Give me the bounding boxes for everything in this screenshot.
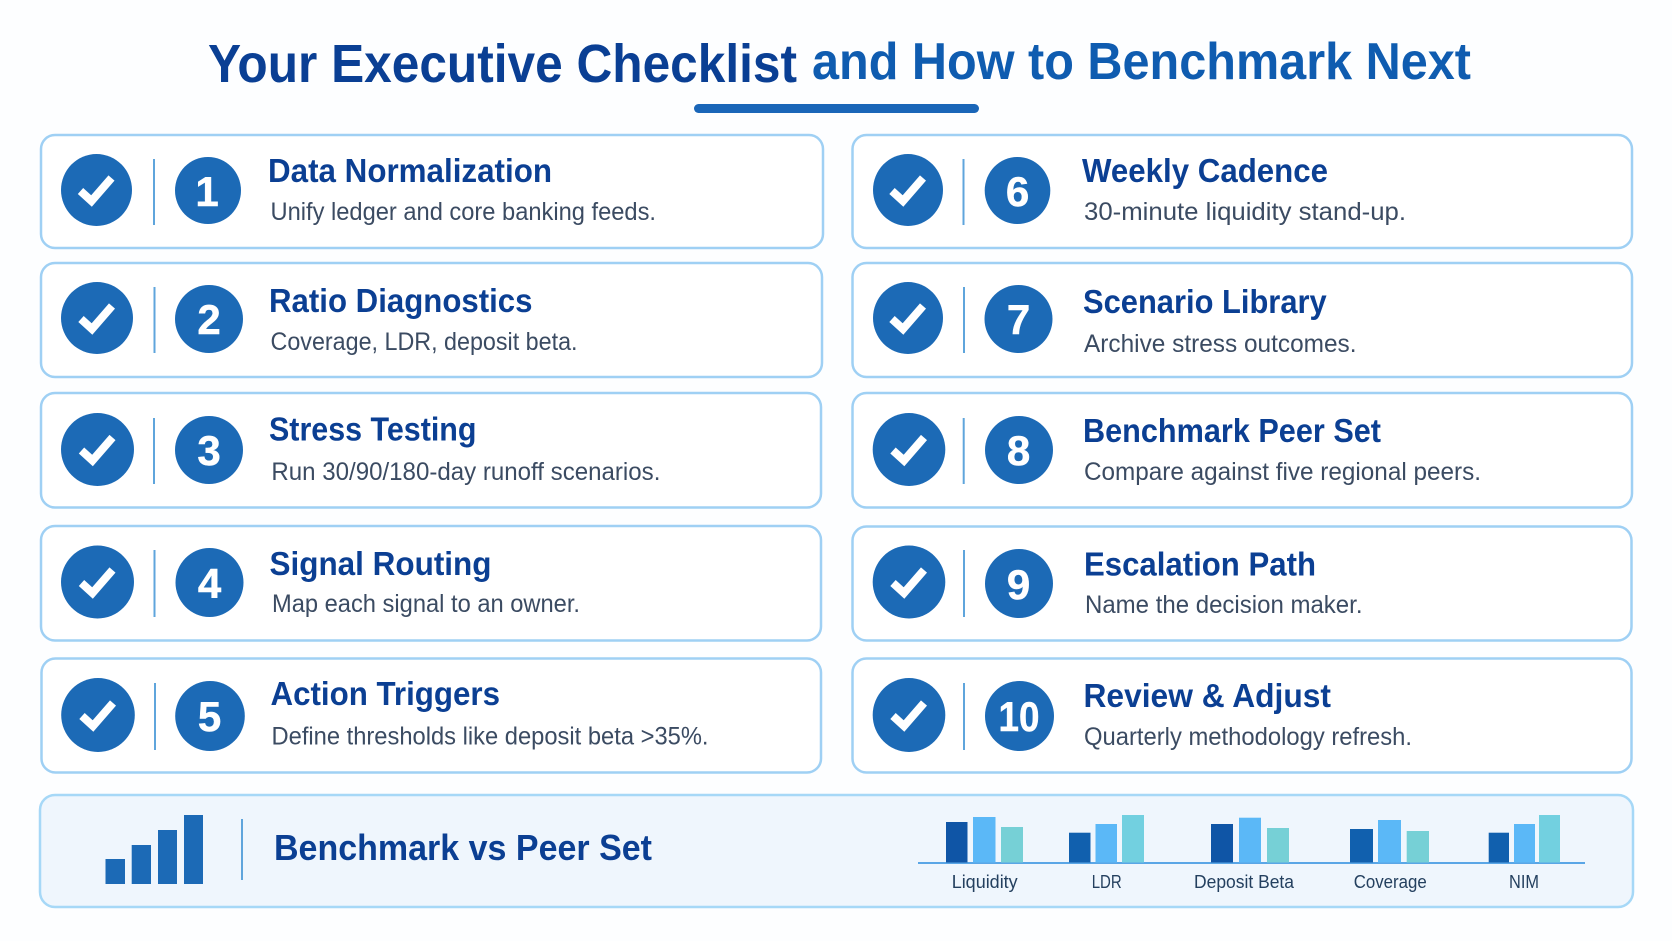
item title: Review & Adjust — [1084, 677, 1331, 714]
icon: check — [873, 546, 945, 618]
group: Deposit Beta: Deposit Beta — [1194, 871, 1295, 892]
item description: Quarterly methodology refresh. — [1084, 723, 1412, 751]
group: Coverage — [1350, 820, 1429, 892]
number badge 8: 8 — [1007, 427, 1030, 474]
icon: check — [873, 282, 943, 354]
item description: Map each signal to an owner. — [272, 590, 580, 618]
item title: Escalation Path — [1084, 546, 1316, 582]
number badge 6: 6 — [1006, 168, 1029, 215]
number badge 9: 9 — [1007, 561, 1030, 608]
icon: check — [873, 154, 943, 226]
item title: Ratio Diagnostics — [269, 282, 532, 319]
number badge 5: 5 — [198, 693, 221, 740]
item title: Data Normalization — [268, 152, 552, 189]
number badge 3 — [175, 416, 243, 484]
number badge 9 — [985, 549, 1053, 618]
title underline — [694, 104, 979, 113]
number badge 5 — [175, 681, 245, 751]
item description: Run 30/90/180-day runoff scenarios. — [271, 458, 660, 486]
number badge 6 — [985, 157, 1050, 224]
icon: check — [873, 678, 945, 752]
number badge 3: 3 — [197, 427, 221, 474]
item description: 30-minute liquidity stand-up. — [1084, 198, 1406, 226]
panel: item 7 — [852, 263, 1632, 377]
item description: Compare against five regional peers. — [1084, 458, 1481, 486]
group: Deposit Beta — [1194, 818, 1295, 892]
number badge 1: 1 — [195, 168, 219, 215]
number badge 2: 2 — [197, 296, 221, 343]
number badge 10: 10 — [998, 693, 1040, 740]
number badge 2 — [175, 285, 243, 353]
icon: check — [61, 413, 134, 486]
item description: Define thresholds like deposit beta >35%. — [272, 722, 708, 750]
icon: bar chart — [106, 815, 203, 884]
number badge 4 — [176, 548, 244, 617]
panel: item 8 — [852, 393, 1632, 508]
item title: Benchmark Peer Set — [1083, 412, 1381, 449]
panel: item 9 — [852, 526, 1632, 640]
item title: Stress Testing — [269, 410, 476, 448]
title — [208, 33, 1471, 94]
title: Your Executive Checklist — [208, 34, 797, 94]
bar chart: peer comparison — [918, 815, 1585, 892]
panel: item 6 — [852, 135, 1632, 248]
group: Liquidity: Liquidity — [952, 871, 1018, 892]
item description: Archive stress outcomes. — [1084, 330, 1356, 358]
number badge 10 — [985, 681, 1054, 751]
item title: Signal Routing — [270, 545, 492, 582]
item title: Weekly Cadence — [1082, 152, 1328, 189]
number badge 1 — [175, 157, 241, 224]
number badge 7 — [984, 285, 1052, 353]
item description: Coverage, LDR, deposit beta. — [270, 328, 578, 356]
panel: item 5 — [42, 658, 821, 772]
number badge 8 — [985, 416, 1053, 484]
item description: Unify ledger and core banking feeds. — [270, 198, 656, 226]
item description: Name the decision maker. — [1085, 591, 1362, 619]
group: Coverage: Coverage — [1354, 871, 1427, 892]
icon: check — [61, 678, 135, 752]
group: Liquidity — [946, 817, 1023, 892]
group: NIM — [1489, 815, 1560, 892]
item title: Scenario Library — [1083, 283, 1327, 320]
icon: check — [873, 413, 945, 486]
icon: check — [61, 282, 133, 354]
panel: item 3 — [41, 393, 821, 508]
icon: check — [61, 154, 132, 226]
panel: item 4 — [41, 526, 821, 640]
panel: item 1 — [41, 135, 823, 248]
title: and How to Benchmark Next — [812, 33, 1471, 91]
item title: Action Triggers — [270, 675, 500, 712]
panel: item 2 — [41, 263, 822, 377]
panel heading: Benchmark vs Peer Set — [274, 827, 652, 868]
number badge 7: 7 — [1007, 296, 1030, 343]
number badge 4: 4 — [198, 560, 222, 607]
panel: benchmark vs peer set — [40, 795, 1633, 907]
group: NIM: NIM — [1509, 871, 1539, 892]
group: LDR — [1069, 815, 1144, 892]
panel: item 10 — [852, 658, 1632, 772]
icon: check — [61, 546, 134, 618]
group: LDR: LDR — [1092, 871, 1122, 892]
